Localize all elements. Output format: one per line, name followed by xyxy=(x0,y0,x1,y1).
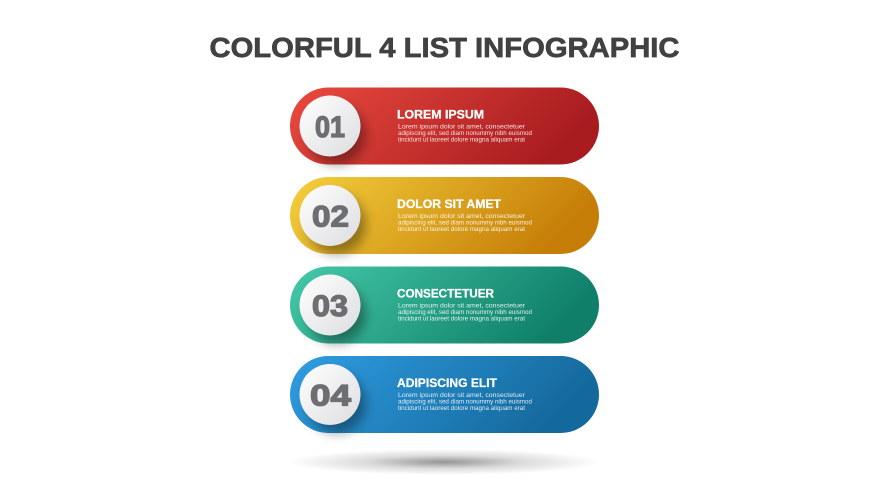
heading: LOREM IPSUM xyxy=(397,110,484,122)
ground shadow xyxy=(288,449,600,475)
number: 02 xyxy=(312,200,349,234)
heading: ADIPISCING ELIT xyxy=(397,378,497,390)
number badge xyxy=(300,96,360,156)
pill: green xyxy=(290,266,599,344)
body text: adipiscing elit, sed diam nonummy nibh euismod xyxy=(398,131,532,137)
body text: Lorem ipsum dolor sit amet, consectetuer xyxy=(398,393,525,399)
panel: item 02 xyxy=(290,177,599,254)
circle shadow xyxy=(308,194,366,254)
body text: tincidunt ut laoreet dolore magna aliquam erat xyxy=(398,227,525,233)
body text: adipiscing elit, sed diam nonummy nibh euismod xyxy=(398,220,532,226)
body text: tincidunt ut laoreet dolore magna aliquam erat xyxy=(398,316,525,322)
body text xyxy=(398,393,532,412)
body text: tincidunt ut laoreet dolore magna aliquam erat xyxy=(398,138,525,144)
panel: item 04 xyxy=(290,356,599,434)
body text: Lorem ipsum dolor sit amet, consectetuer xyxy=(398,124,525,130)
panel: item 03 xyxy=(290,266,599,344)
number badge xyxy=(300,364,360,425)
number: 03 xyxy=(312,290,348,323)
number badge xyxy=(300,185,360,246)
body text xyxy=(398,304,532,322)
panel: item 01 xyxy=(290,88,599,165)
pill: red xyxy=(290,88,599,164)
body text: adipiscing elit, sed diam nonummy nibh euismod xyxy=(398,400,532,406)
body text: tincidunt ut laoreet dolore magna aliquam erat xyxy=(398,406,525,412)
number badge xyxy=(300,274,360,336)
circle shadow xyxy=(308,374,366,434)
heading: CONSECTETUER xyxy=(397,288,495,300)
body text xyxy=(398,214,532,233)
body text xyxy=(398,124,532,144)
number: 04 xyxy=(310,380,351,412)
body text: Lorem ipsum dolor sit amet, consectetuer xyxy=(398,304,525,310)
body text: Lorem ipsum dolor sit amet, consectetuer xyxy=(398,214,525,220)
pill: blue xyxy=(290,356,599,433)
body text: adipiscing elit, sed diam nonummy nibh euismod xyxy=(398,310,532,316)
circle shadow xyxy=(308,105,366,165)
circle shadow xyxy=(308,284,366,344)
number: 01 xyxy=(315,111,345,144)
pill: yellow xyxy=(290,177,599,254)
heading: DOLOR SIT AMET xyxy=(397,199,501,211)
title: COLORFUL 4 LIST INFOGRAPHIC xyxy=(210,32,680,63)
